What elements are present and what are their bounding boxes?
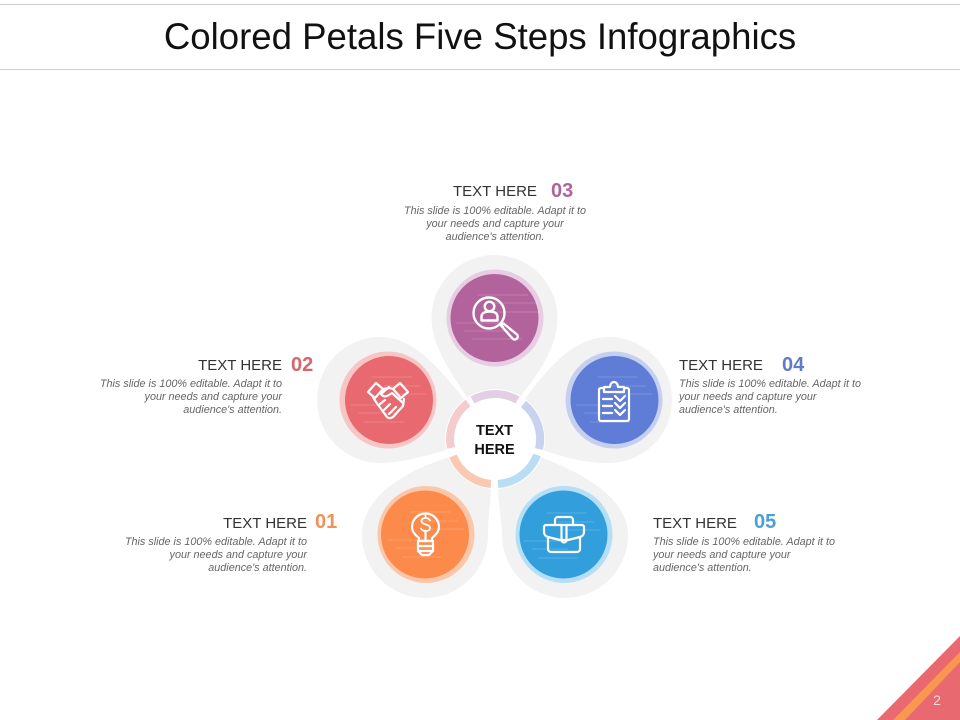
label 04: TEXT HERE [679,357,763,374]
step 03 circle with search-person icon [446,270,544,366]
petal 01 background [362,439,495,598]
label 04: your needs and capture your [679,391,816,403]
label 03: TEXT HERE [453,183,537,200]
petal 02 background [317,337,495,463]
label 01: This slide is 100% editable. Adapt it to [125,536,307,548]
label 04: This slide is 100% editable. Adapt it to [679,378,861,390]
step 05 circle with briefcase icon [516,486,612,583]
petal 05 background [495,439,628,598]
label 01: audience's attention. [208,562,307,574]
label 02: This slide is 100% editable. Adapt it to [100,378,282,390]
label 01: your needs and capture your [170,549,307,561]
centre disc [445,389,545,489]
label 02: TEXT HERE [198,357,282,374]
label 03: This slide is 100% editable. Adapt it to [404,205,586,217]
label 02: audience's attention. [183,404,282,416]
label 04: 04 [782,354,804,376]
centre disc: HERE [474,442,515,458]
label 02 [100,354,313,416]
label 01: 01 [315,511,337,533]
label 04: audience's attention. [679,404,778,416]
centre label: TEXT [476,423,513,439]
step 02 circle with handshake icon [340,352,436,448]
ring segment 01 [453,456,491,484]
petal 03 background [432,255,558,439]
label 02: your needs and capture your [145,391,282,403]
step 04 circle with clipboard icon [566,352,662,448]
ring segment 02 [450,403,468,448]
label 05: your needs and capture your [653,549,790,561]
ring segment 03 [472,394,518,400]
label 05: 05 [754,511,776,533]
label 05: TEXT HERE [653,515,737,532]
petal 04 background [495,337,672,463]
ring segment 04 [524,404,540,449]
label 03: audience's attention. [446,231,544,243]
ring segment 05 [498,455,537,484]
label 05 [652,511,835,574]
label 03 [404,180,586,243]
header band with title [0,4,960,70]
label 04 [678,354,861,416]
title: Colored Petals Five Steps Infographics [164,16,796,57]
step 01 circle with light bulb icon [378,486,474,583]
page number: 2 [933,692,941,708]
label 03: 03 [551,180,573,202]
label 01 [125,511,337,574]
label 03: your needs and capture your [426,218,564,230]
label 05: This slide is 100% editable. Adapt it to [653,536,835,548]
corner decoration [877,636,960,720]
label 05: audience's attention. [653,562,752,574]
label 02: 02 [291,354,313,376]
label 01: TEXT HERE [223,515,307,532]
